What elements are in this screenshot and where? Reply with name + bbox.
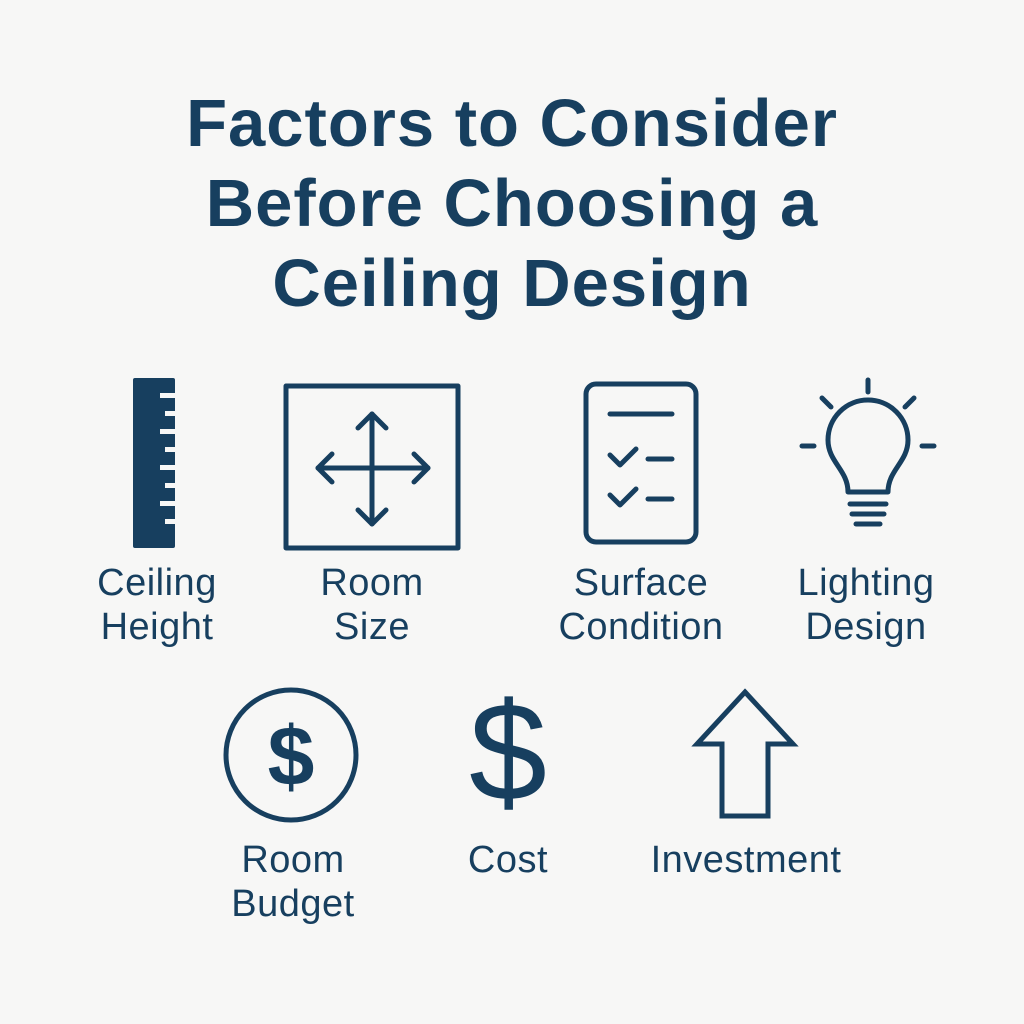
label: room budget <box>231 839 355 925</box>
icon: dollar circle <box>226 690 356 820</box>
label: room budget: Room <box>241 839 345 881</box>
icon: dollar circle: $ <box>268 709 314 803</box>
label: surface condition <box>558 562 724 648</box>
label: ceiling height: Height <box>101 606 213 648</box>
title: Ceiling Design <box>272 246 752 321</box>
label: ceiling height <box>97 562 217 648</box>
label: room size <box>320 562 424 648</box>
label: ceiling height: Ceiling <box>97 562 217 604</box>
icon: checklist <box>586 384 696 542</box>
label: room size: Room <box>320 562 424 604</box>
icon: room size <box>286 386 458 548</box>
title: Factors to Consider <box>186 86 838 161</box>
label: lighting design: Design <box>805 606 927 648</box>
label: room budget: Budget <box>231 883 355 925</box>
icon: light bulb <box>802 380 934 524</box>
icon: arrow up <box>697 692 793 816</box>
label: investment: Investment <box>651 839 841 881</box>
title: Before Choosing a <box>206 166 818 241</box>
label: lighting design <box>797 562 935 648</box>
title <box>186 86 838 321</box>
icon: dollar: $ <box>469 673 547 830</box>
label: cost: Cost <box>468 839 548 881</box>
label: room size: Size <box>334 606 410 648</box>
label: lighting design: Lighting <box>797 562 935 604</box>
label: surface condition: Condition <box>558 606 724 648</box>
icon: ruler <box>133 378 175 548</box>
label: surface condition: Surface <box>574 562 708 604</box>
